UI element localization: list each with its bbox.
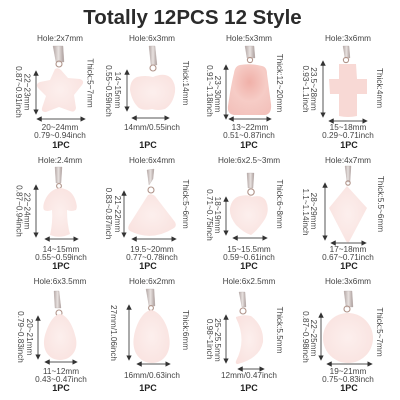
width arrow bbox=[134, 117, 167, 119]
panel: apple pendant bbox=[104, 34, 190, 150]
height arrow bbox=[126, 72, 128, 109]
width labels: 15~15.5mm bbox=[227, 245, 271, 254]
height labels: 0.79~0.83inch bbox=[16, 311, 25, 363]
width labels: 15~18mm bbox=[330, 123, 366, 132]
width labels: 0.75~0.83inch bbox=[322, 375, 374, 384]
width arrow bbox=[139, 363, 168, 365]
height labels bbox=[301, 65, 318, 113]
height labels bbox=[301, 188, 318, 236]
width labels: 19.5~20mm bbox=[130, 245, 174, 254]
width arrow bbox=[240, 368, 262, 370]
quantity: 1PC bbox=[240, 261, 258, 271]
width labels: 0.67~0.71inch bbox=[322, 253, 374, 262]
panel: round pendant bbox=[301, 277, 384, 393]
panel: freeform pendant bbox=[205, 34, 284, 150]
height labels: 1.1~1.14inch bbox=[301, 188, 310, 236]
panel: moon pendant bbox=[205, 277, 284, 393]
thickness label: Thick:5.5mm bbox=[275, 307, 284, 354]
icon: apple pendant bbox=[130, 46, 175, 110]
icon: moon pendant bbox=[236, 292, 263, 364]
hole label: Hole:3x6mm bbox=[325, 34, 371, 43]
quantity: 1PC bbox=[139, 140, 157, 150]
width labels: 0.43~0.47inch bbox=[35, 375, 87, 384]
height labels: 20~21mm bbox=[25, 319, 34, 355]
height labels bbox=[16, 311, 34, 363]
height labels: 22~25mm bbox=[309, 320, 318, 356]
height labels: 0.93~1.1inch bbox=[301, 65, 310, 113]
hole label: Hole:3x6mm bbox=[325, 277, 371, 286]
height arrow bbox=[225, 199, 227, 233]
panel: cross pendant bbox=[301, 34, 384, 150]
icon: kite pendant bbox=[329, 166, 367, 242]
title: Totally 12PCS 12 Style bbox=[83, 6, 302, 29]
height arrow bbox=[128, 307, 130, 358]
width arrow bbox=[231, 118, 269, 120]
width labels: 0.59~0.61inch bbox=[223, 253, 275, 262]
height labels: 0.87~0.91inch bbox=[14, 66, 23, 118]
width label: 14mm/0.55inch bbox=[124, 123, 180, 132]
panel: fan pendant bbox=[104, 156, 190, 271]
height labels: 0.71~0.75inch bbox=[205, 189, 214, 241]
panel: small teardrop pendant bbox=[16, 277, 87, 393]
hole label: Hole:6x3mm bbox=[129, 34, 175, 43]
icon: freeform pendant bbox=[228, 46, 271, 115]
quantity: 1PC bbox=[240, 140, 258, 150]
quantity: 1PC bbox=[139, 261, 157, 271]
quantity: 1PC bbox=[52, 140, 70, 150]
thickness label: Thick:4mm bbox=[375, 68, 384, 108]
hole label: Hole:4x7mm bbox=[325, 156, 371, 165]
height arrow bbox=[37, 318, 39, 357]
icon: small teardrop pendant bbox=[44, 291, 76, 360]
hole label: Hole:2x7mm bbox=[37, 34, 83, 43]
width labels: 0.51~0.87inch bbox=[223, 131, 275, 140]
height labels bbox=[205, 318, 222, 362]
height arrow bbox=[225, 317, 227, 361]
height arrow bbox=[320, 315, 322, 358]
height labels bbox=[301, 311, 318, 363]
width labels: 0.77~0.78inch bbox=[126, 253, 178, 262]
width arrow bbox=[331, 120, 365, 122]
height labels: 25~25.5mm bbox=[213, 318, 222, 362]
height labels bbox=[14, 66, 32, 118]
thickness label: Thick:14mm bbox=[181, 61, 190, 105]
height arrow bbox=[322, 63, 324, 115]
icon: heart pendant bbox=[230, 173, 268, 235]
icon: cross pendant bbox=[329, 46, 367, 117]
width arrow bbox=[134, 238, 174, 240]
width label: 12mm/0.47inch bbox=[221, 371, 277, 380]
height labels bbox=[205, 189, 222, 241]
quantity: 1PC bbox=[139, 383, 157, 393]
quantity: 1PC bbox=[52, 261, 70, 271]
quantity: 1PC bbox=[52, 383, 70, 393]
height arrow bbox=[324, 185, 326, 238]
height labels: 0.87~0.98inch bbox=[301, 311, 310, 363]
height arrow bbox=[225, 67, 227, 117]
panel: large teardrop pendant bbox=[109, 277, 190, 393]
height label: 27mm/1.06inch bbox=[109, 305, 118, 361]
thickness label: Thick:6~8mm bbox=[275, 179, 284, 229]
icon: mushroom pendant bbox=[43, 167, 77, 237]
height labels: 22~23mm bbox=[22, 74, 32, 110]
height labels: 21~22mm bbox=[113, 196, 122, 232]
width labels bbox=[35, 367, 87, 384]
hole label: Hole:6x2mm bbox=[129, 277, 175, 286]
width labels bbox=[126, 245, 178, 262]
thickness label: Thick:12~20mm bbox=[275, 54, 284, 112]
quantity: 1PC bbox=[240, 383, 258, 393]
panel: kite pendant bbox=[301, 156, 385, 271]
width labels: 20~24mm bbox=[42, 123, 78, 132]
width labels: 19~21mm bbox=[330, 367, 366, 376]
width arrow bbox=[47, 361, 75, 363]
quantity: 1PC bbox=[340, 261, 358, 271]
height labels: 23.5~28mm bbox=[309, 67, 318, 111]
width labels bbox=[223, 123, 275, 140]
thickness label: Thick:5~7mm bbox=[375, 307, 384, 357]
icon: large teardrop pendant bbox=[133, 289, 170, 363]
width labels: 0.29~0.71inch bbox=[322, 131, 374, 140]
thickness label: Thick:5~6mm bbox=[181, 179, 190, 229]
height labels: 18~19mm bbox=[213, 197, 222, 233]
hole label: Hole:6x2.5mm bbox=[223, 277, 276, 286]
width labels bbox=[322, 123, 374, 140]
quantity: 1PC bbox=[340, 140, 358, 150]
height labels: 0.55~0.59inch bbox=[104, 65, 113, 117]
width arrow bbox=[235, 237, 265, 239]
width labels: 11~12mm bbox=[43, 367, 79, 376]
width labels: 17~18mm bbox=[330, 245, 366, 254]
height labels: 0.98~1inch bbox=[205, 319, 214, 360]
height labels bbox=[104, 188, 122, 240]
hole label: Hole:6x2.5~3mm bbox=[218, 156, 280, 165]
width labels bbox=[35, 245, 87, 262]
panel: mushroom pendant bbox=[14, 156, 87, 271]
thickness label: Thick:5.5~6mm bbox=[376, 176, 385, 232]
hole label: Hole:6x4mm bbox=[129, 156, 175, 165]
height labels bbox=[205, 65, 222, 117]
height labels bbox=[14, 185, 32, 237]
height labels: 22~24mm bbox=[22, 193, 32, 229]
quantity: 1PC bbox=[340, 383, 358, 393]
width labels bbox=[223, 245, 275, 262]
thickness label: Thick:5~7mm bbox=[86, 58, 94, 108]
width arrow bbox=[39, 118, 83, 120]
height arrow bbox=[35, 73, 37, 112]
height arrow bbox=[123, 193, 125, 235]
hole label: Hole:6x3.5mm bbox=[34, 277, 87, 286]
width labels: 14~15mm bbox=[43, 245, 79, 254]
height labels: 28~29mm bbox=[309, 193, 318, 229]
height labels: 0.91~1.18inch bbox=[205, 65, 214, 117]
width labels: 13~22mm bbox=[232, 123, 268, 132]
width labels: 0.55~0.59inch bbox=[35, 253, 87, 262]
panel: star pendant bbox=[14, 34, 94, 150]
hole label: Hole:5x3mm bbox=[226, 34, 272, 43]
panel: heart pendant bbox=[205, 156, 284, 271]
thickness label: Thick:6mm bbox=[181, 310, 190, 350]
width labels bbox=[322, 245, 374, 262]
width labels: 0.79~0.94inch bbox=[34, 131, 86, 140]
height labels: 0.83~0.87inch bbox=[104, 188, 113, 240]
icon: fan pendant bbox=[128, 169, 176, 236]
width labels bbox=[322, 367, 374, 384]
hole label: Hole:2.4mm bbox=[38, 156, 82, 165]
icon: round pendant bbox=[323, 291, 373, 363]
width arrow bbox=[47, 238, 76, 240]
height labels: 14~15mm bbox=[113, 72, 122, 108]
icon: star pendant bbox=[37, 46, 83, 112]
height arrow bbox=[35, 187, 37, 235]
width arrow bbox=[329, 363, 370, 365]
height labels bbox=[104, 65, 122, 117]
width labels bbox=[34, 123, 86, 140]
width label: 16mm/0.63inch bbox=[124, 371, 180, 380]
height labels: 0.87~0.94inch bbox=[14, 185, 24, 237]
width arrow bbox=[333, 242, 364, 244]
height labels: 23~30mm bbox=[213, 76, 222, 112]
